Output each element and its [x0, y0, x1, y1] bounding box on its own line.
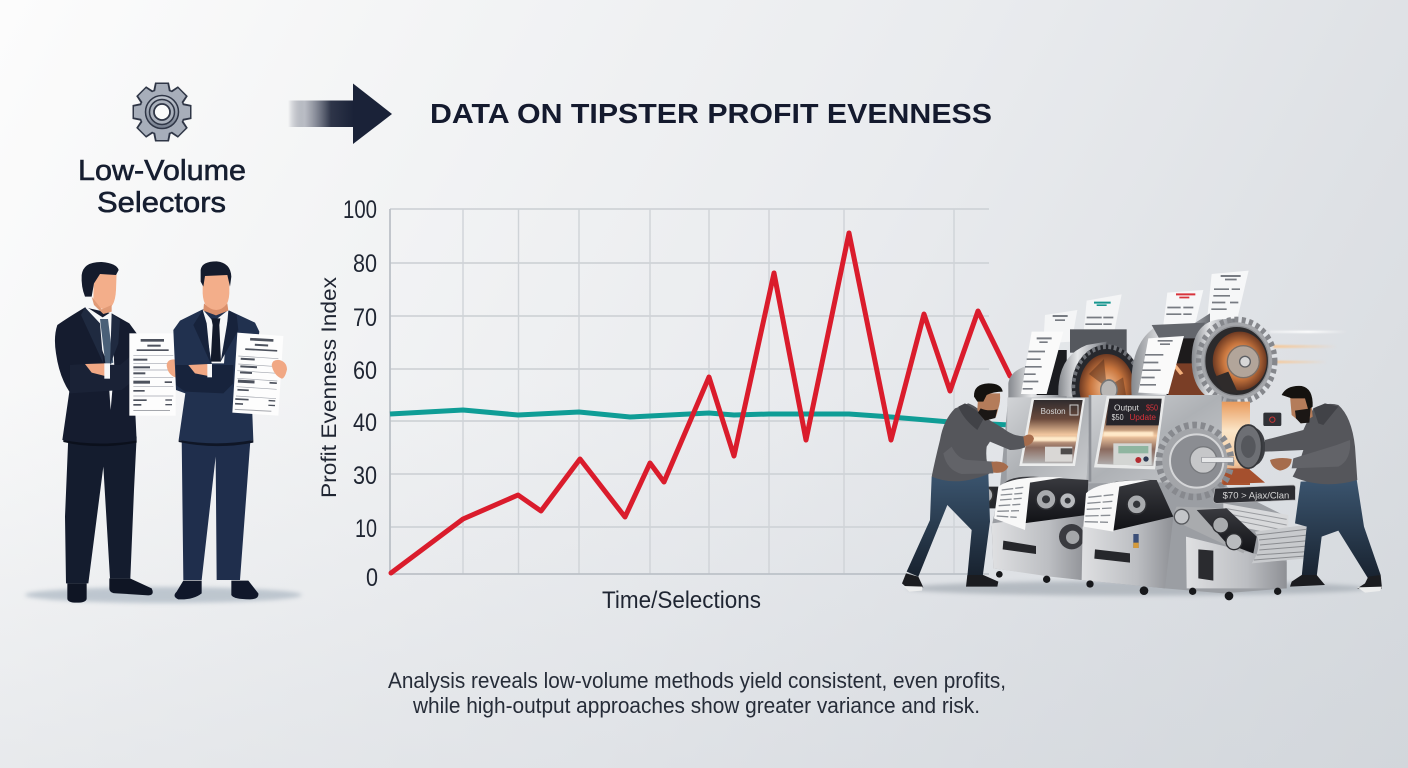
screen right: Update: [1129, 413, 1157, 422]
y-axis tick labels: 10: [355, 515, 377, 543]
glow behind lower gear: [1222, 402, 1265, 485]
line chart: [318, 196, 1010, 614]
man right: [173, 261, 259, 599]
x-axis title: Time/Selections: [602, 587, 761, 614]
screen right: [1094, 396, 1165, 469]
y-axis title: Profit Evenness Index: [318, 276, 341, 498]
back receipts: [1043, 271, 1249, 345]
status plate: [1213, 485, 1295, 503]
left drum: [1072, 345, 1142, 430]
worker left: [902, 383, 1034, 592]
right machine housing: [1131, 313, 1210, 397]
heading: Low-Volume Selectors: Low-Volume: [78, 155, 246, 187]
screen left: Boston: [1041, 406, 1066, 416]
title: DATA ON TIPSTER PROFIT EVENNESS: [430, 98, 992, 129]
y-axis tick labels: 60: [353, 357, 377, 385]
worker right: [1265, 386, 1382, 593]
machine backing silhouette: [992, 397, 1287, 593]
illustration: two low-volume selectors: [25, 261, 302, 603]
illustration: high-output machines and workers: [902, 271, 1382, 600]
caption: Analysis reveals low-volume methods yield consistent, even profits,: [388, 668, 1006, 693]
feed unit left: [977, 477, 1088, 580]
man left: [55, 262, 153, 603]
y-axis tick labels: 100: [343, 196, 377, 224]
front machine panels: [1007, 395, 1222, 483]
back machine housing: [1008, 329, 1127, 400]
arrow: [288, 84, 392, 144]
heading: Low-Volume Selectors: Selectors: [97, 187, 226, 219]
y-axis tick labels: 80: [353, 250, 377, 278]
paper left: [129, 333, 181, 416]
y-axis tick labels: 70: [353, 304, 377, 332]
lower gear: [1159, 425, 1233, 497]
paper right: [232, 333, 287, 416]
y-axis tick labels: 30: [353, 462, 377, 490]
output unit: [1174, 503, 1309, 588]
ground shadow: [907, 581, 1367, 596]
screen right: $50: [1146, 404, 1158, 413]
screen right: $50: [1112, 413, 1124, 422]
screen right: Output: [1114, 404, 1140, 413]
teal series: [390, 410, 1010, 425]
heading: Low-Volume Selectors: [78, 155, 246, 219]
y-axis tick labels: 0: [366, 564, 378, 592]
red series: [391, 233, 1010, 573]
flywheel: [1235, 425, 1265, 468]
machine feet: [996, 571, 1281, 600]
y-axis tick labels: 40: [353, 409, 377, 437]
ground shadow: [25, 587, 302, 603]
caption: while high-output approaches show greater variance and risk.: [412, 693, 980, 718]
large gear: [1192, 318, 1275, 403]
status plate: $70 > Ajax/Clan: [1223, 491, 1289, 501]
screen left: [1019, 398, 1085, 466]
icon: gear: [132, 82, 192, 142]
warning lamp: [1263, 413, 1281, 426]
front receipts: [1021, 332, 1184, 394]
y-axis tick labels: [343, 196, 378, 592]
caption: [388, 668, 1006, 718]
feed unit right: [1082, 480, 1173, 588]
motion streaks: [1270, 331, 1347, 363]
